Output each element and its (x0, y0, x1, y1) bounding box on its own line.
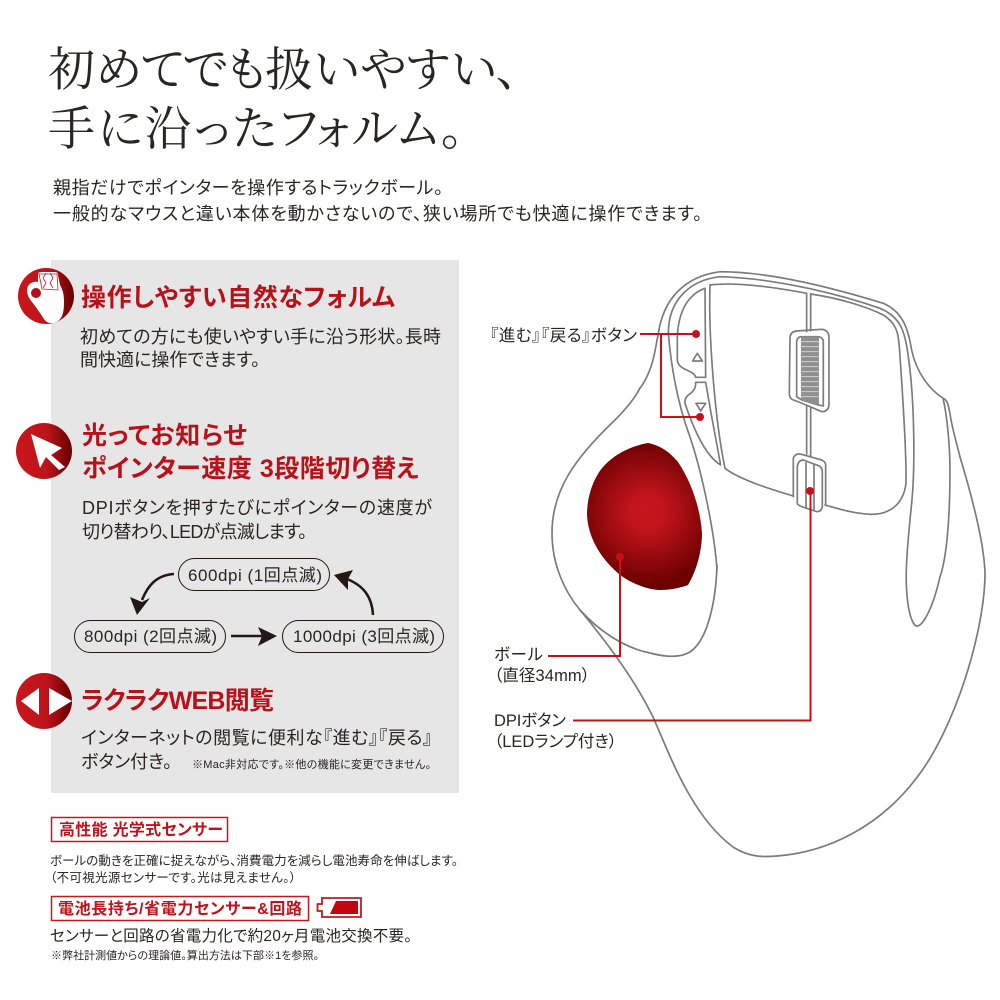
text: pointer speed: 切り替わり、LEDが点滅します。 (82, 522, 307, 542)
heading: pointer speed (82, 422, 419, 483)
trackball (587, 443, 702, 590)
text: pointer speed (82, 498, 432, 542)
text: web browsing (81, 728, 432, 772)
callout: forward and back buttons (490, 326, 704, 421)
heading: pointer speed: ポインター速度 3段階切り替え (82, 455, 419, 483)
badge: battery saving: 電池長持ち/省電力センサー&回路 (58, 899, 302, 918)
pill: 600dpi (178, 558, 330, 590)
pill: 800dpi (74, 620, 226, 652)
text: web browsing: ボタン付き。 (81, 752, 172, 772)
text: pointer speed: DPIボタンを押すたびにポインターの速度が (82, 498, 432, 518)
pill: 800dpi: 800dpi (2回点滅) (84, 627, 217, 646)
text: optical sensor (50, 853, 458, 885)
main buttons (710, 285, 793, 496)
callout: dpi button (494, 487, 814, 751)
icon: mouse form (18, 268, 74, 324)
diagram: dpi cycle (74, 558, 444, 652)
title: 手に沿ったフォルム。 (48, 92, 465, 159)
heading: natural form: 操作しやすい自然なフォルム (81, 284, 395, 312)
text: web browsing: ※Mac非対応です。※他の機能に変更できません。 (192, 757, 431, 771)
mouse top shell (640, 272, 960, 626)
badge: optical sensor (52, 818, 228, 842)
mouse body outline (552, 388, 985, 857)
text: natural form (80, 327, 441, 370)
pill: 600dpi: 600dpi (1回点滅) (188, 566, 322, 585)
icon: back and forward (16, 673, 72, 729)
intro text: 親指だけでポインターを操作するトラックボール。 (53, 178, 443, 198)
text: optical sensor: （不可視光源センサーです。光は見えません。） (50, 871, 296, 885)
callout: ball: （直径34mm） (494, 666, 590, 685)
text: battery life: センサーと回路の省電力化で約20ヶ月電池交換不要。 (50, 927, 412, 945)
text: battery life (50, 927, 412, 962)
callout: ball: ボール (494, 645, 543, 664)
illustration: trackball mouse (552, 272, 985, 857)
heading: pointer speed: 光ってお知らせ (82, 422, 247, 450)
intro text: 一般的なマウスと違い本体を動かさないので、狭い場所でも快適に操作できます。 (53, 204, 702, 224)
icon: pointer (16, 423, 72, 479)
badge: optical sensor: 高性能 光学式センサー (59, 820, 223, 839)
callout: ball (494, 553, 624, 685)
callout: dpi button: （LEDランプ付き） (494, 732, 617, 751)
scroll wheel (789, 329, 829, 412)
text: natural form: 間快適に操作できます。 (80, 350, 260, 370)
arrow: 600 to 800 (130, 574, 174, 615)
arrow: 1000 to 600 (334, 570, 373, 615)
text: natural form: 初めての方にも使いやすい手に沿う形状。長時 (80, 327, 441, 347)
heading: web browsing: ラクラクWEB閲覧 (81, 687, 274, 715)
title (48, 33, 520, 159)
dpi button (793, 454, 826, 512)
callout: dpi button: DPIボタン (494, 711, 566, 730)
pill: 1000dpi: 1000dpi (3回点滅) (293, 627, 435, 646)
text: optical sensor: ボールの動きを正確に捉えながら、消費電力を減らし電池寿命を伸ばします。 (50, 853, 458, 868)
pill: 1000dpi (282, 620, 444, 652)
intro text (53, 178, 702, 224)
badge: battery saving (52, 896, 308, 920)
icon: battery (318, 898, 361, 917)
side buttons (677, 288, 721, 465)
arrow: 800 to 1000 (231, 627, 277, 646)
text: web browsing: インターネットの閲覧に便利な『進む』『戻る』 (81, 728, 432, 748)
title: 初めてでも扱いやすい、 (48, 33, 520, 100)
callout: forward and back buttons: 『進む』『戻る』ボタン (490, 326, 637, 345)
text: battery life: ※弊社計測値からの理論値。算出方法は下部※1を参照。 (51, 948, 319, 962)
panel: features (16, 260, 459, 793)
